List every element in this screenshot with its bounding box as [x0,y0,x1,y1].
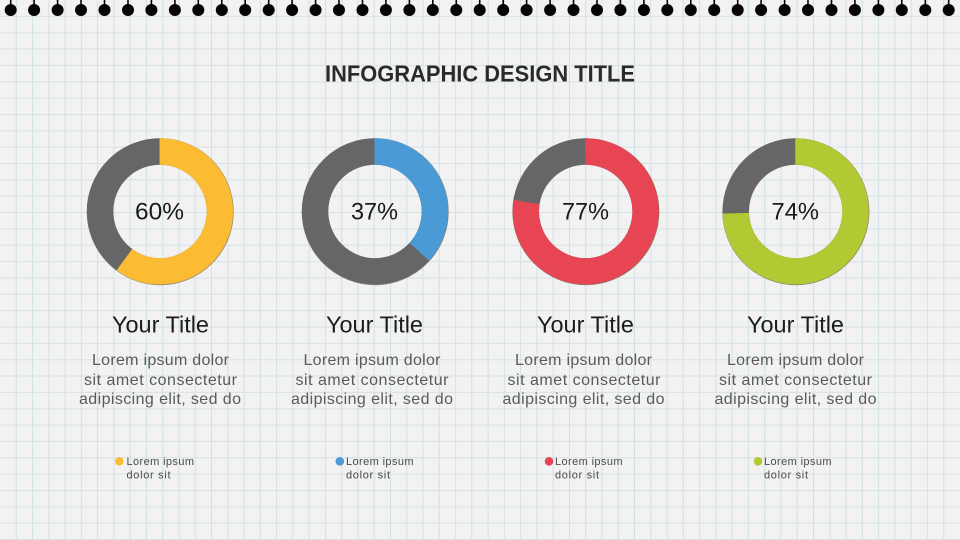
description text: sit amet consectetur [296,372,449,389]
legend: Lorem ipsum [346,456,414,468]
column heading: Your Title [112,312,209,338]
title: INFOGRAPHIC DESIGN TITLE [325,60,635,86]
column heading: Your Title [537,312,634,338]
donut chart: 37%: 37% [351,198,398,226]
legend [336,456,414,482]
legend [545,456,622,482]
description text [502,352,665,408]
donut chart: 60% [87,139,233,285]
description text [714,352,877,408]
legend: dolor sit [764,470,808,482]
legend [115,456,194,482]
description text: sit amet consectetur [719,372,873,389]
legend: Lorem ipsum [555,456,622,468]
donut chart: 60%: 60% [135,198,184,226]
legend [754,456,832,482]
column heading: Your Title [326,312,423,338]
column heading: Your Title [747,312,844,338]
description text [79,352,241,408]
description text: sit amet consectetur [84,372,238,389]
donut chart: 37% [302,139,448,285]
legend: dolor sit [555,470,599,482]
legend: dolor sit [126,470,170,482]
donut chart: 77% [513,139,659,285]
description text: Lorem ipsum dolor [727,352,865,369]
description text: Lorem ipsum dolor [304,352,441,369]
legend: dolor sit [346,470,390,482]
donut chart: 74% [723,139,869,285]
description text: Lorem ipsum dolor [92,352,230,369]
description text: adipiscing elit, sed do [291,391,453,408]
panel: column 4 [714,139,877,481]
donut chart: 74%: 74% [772,198,819,226]
legend: Lorem ipsum [126,456,194,468]
description text: adipiscing elit, sed do [79,391,241,408]
description text: adipiscing elit, sed do [502,391,665,408]
panel: column 2 [291,139,453,481]
legend: Lorem ipsum [764,456,832,468]
notebook binding holes [5,0,955,16]
panel: column 3 [502,139,665,481]
donut chart: 77%: 77% [562,198,609,226]
panel: column 1 [79,139,241,481]
description text: adipiscing elit, sed do [714,391,877,408]
description text [291,352,453,408]
description text: sit amet consectetur [508,372,661,389]
description text: Lorem ipsum dolor [515,352,653,369]
